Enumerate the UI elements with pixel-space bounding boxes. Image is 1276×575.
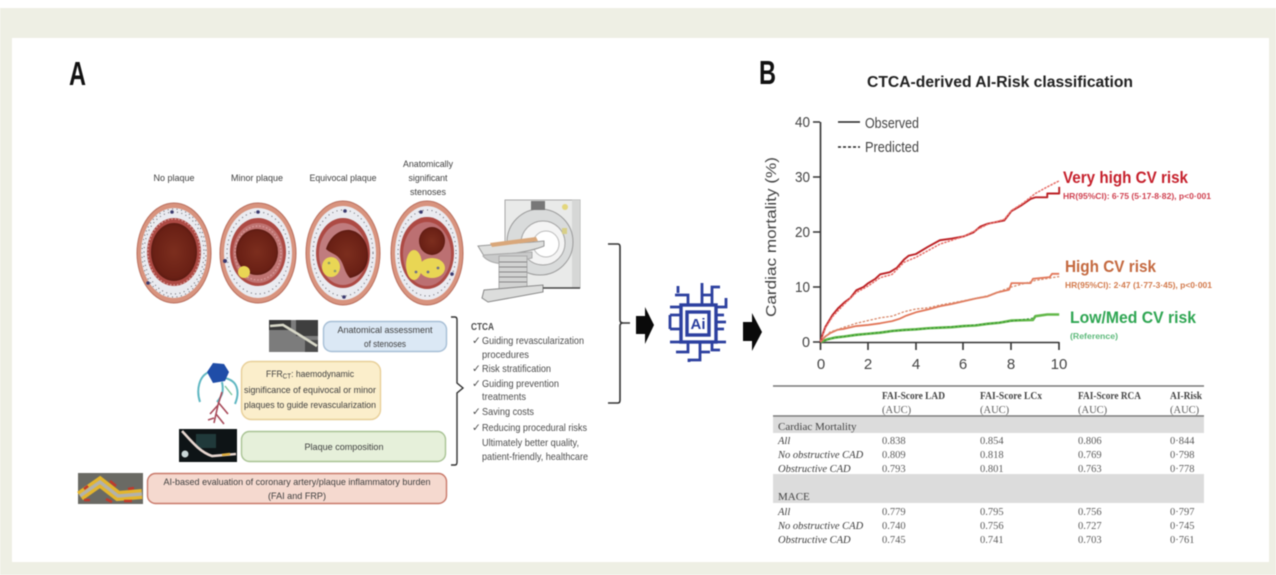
text block: CTCA benefits — [471, 321, 588, 463]
text block: CTCA benefits: Guiding revascularization — [482, 335, 584, 347]
box: FFR CT haemodynamic significance: FFR — [266, 369, 284, 380]
table header: (AUC) — [882, 405, 912, 416]
box: anatomical assessment of stenoses: Anatomical assessment — [338, 325, 433, 336]
table header: AI-Risk — [1170, 391, 1202, 402]
table section: cardiac mortality: Cardiac Mortality — [778, 421, 857, 433]
text block: CTCA benefits: Guiding prevention — [482, 378, 559, 390]
x tick labels: 8 — [1007, 356, 1015, 373]
table section: MACE: 0·761 — [1170, 535, 1194, 546]
table section: cardiac mortality: 0·798 — [1170, 450, 1194, 461]
line chart: cardiac mortality — [763, 114, 1212, 373]
legend: Predicted — [865, 139, 919, 156]
icon: coronary tree FFR model — [198, 363, 237, 424]
box: FFR CT haemodynamic significance: CT — [283, 374, 292, 380]
table section: MACE: 0.779 — [882, 507, 906, 518]
x tick labels — [817, 356, 1067, 373]
bracket: large right bracket — [608, 244, 630, 403]
label: low/med CV risk: (Reference) — [1070, 332, 1118, 341]
table section: MACE: MACE — [778, 491, 810, 503]
curve: very high risk — [820, 181, 1059, 342]
label: anatomically significant stenoses: significant — [408, 173, 448, 184]
table section: MACE: 0·797 — [1170, 507, 1194, 518]
icon: artery with minor plaque — [220, 203, 296, 303]
label: very high CV risk: Very high CV risk — [1063, 168, 1188, 187]
y tick labels — [795, 114, 810, 351]
table section: cardiac mortality: 0.854 — [980, 436, 1004, 447]
table section: cardiac mortality: 0.838 — [882, 436, 906, 447]
label: no plaque: No plaque — [154, 173, 194, 184]
legend: Observed — [865, 115, 919, 132]
label: very high CV risk: HR(95%CI): 6·75 (5·17-8·82), p<0·001 — [1063, 191, 1211, 201]
axes and ticks — [813, 122, 1059, 350]
box: FFR CT haemodynamic significance: significance of equivocal or minor — [244, 385, 376, 396]
table section: MACE: All — [777, 507, 790, 518]
box: FFR CT haemodynamic significance: plaques to guide revascularization — [244, 400, 376, 411]
text block: CTCA benefits: Reducing procedural risks — [482, 422, 587, 434]
table section: cardiac mortality: Obstructive CAD — [778, 464, 851, 475]
icon: AI chip — [670, 283, 726, 362]
text block: CTCA benefits: ✓ — [472, 406, 481, 418]
icon: CT image of stenosis — [269, 320, 318, 352]
y tick labels: 30 — [795, 169, 810, 186]
table header: FAI-Score LCx — [980, 391, 1043, 402]
label: minor plaque: Minor plaque — [231, 173, 283, 184]
label: anatomically significant stenoses — [403, 159, 453, 198]
y tick labels: 0 — [802, 334, 810, 351]
box: FFR CT haemodynamic significance — [242, 362, 380, 420]
table section: cardiac mortality: 0.818 — [980, 450, 1004, 461]
arrow: to chart — [743, 313, 762, 351]
x tick labels: 2 — [864, 356, 872, 373]
text block: CTCA benefits: ✓ — [472, 378, 481, 390]
text block: CTCA benefits: Ultimately better quality, — [482, 437, 579, 449]
table: AUC comparison — [773, 386, 1204, 546]
text block: CTCA benefits: Risk stratification — [482, 363, 551, 375]
curves — [820, 181, 1059, 342]
label: equivocal plaque: Equivocal plaque — [310, 173, 376, 184]
table section: MACE: 0·745 — [1170, 521, 1194, 532]
table section: MACE: 0.703 — [1078, 535, 1102, 546]
label: high CV risk — [1065, 257, 1212, 290]
label: very high CV risk — [1063, 168, 1211, 201]
table section: cardiac mortality: 0.801 — [980, 464, 1004, 475]
bracket: brace around CTCA modalities — [451, 317, 463, 465]
table section: MACE: 0.756 — [980, 521, 1004, 532]
table section: MACE — [777, 491, 1194, 546]
arrow: to AI chip — [636, 307, 654, 344]
table section: MACE: 0.795 — [980, 507, 1004, 518]
table section: cardiac mortality: 0.806 — [1078, 436, 1102, 447]
y tick labels: 20 — [795, 224, 810, 241]
box: AI-based evaluation of inflammatory burden: (FAI and FRP) — [268, 491, 326, 502]
curve: high risk — [820, 274, 1059, 342]
table section: MACE: 0.756 — [1078, 507, 1102, 518]
table section: cardiac mortality: 0·778 — [1170, 464, 1194, 475]
text block: CTCA benefits: ✓ — [472, 422, 481, 434]
label: high CV risk: HR(95%CI): 2·47 (1·77-3·45), p<0·001 — [1065, 280, 1212, 290]
heading: chart title: CTCA-derived AI-Risk classification — [867, 74, 1133, 91]
label: anatomically significant stenoses: Anatomically — [403, 159, 453, 170]
table section: cardiac mortality: 0.793 — [882, 464, 906, 475]
table section: cardiac mortality: 0.769 — [1078, 450, 1102, 461]
table section: cardiac mortality: 0.763 — [1078, 464, 1102, 475]
table header: (AUC) — [980, 405, 1010, 416]
table section: cardiac mortality — [777, 421, 1195, 475]
box: anatomical assessment of stenoses: of stenoses — [364, 339, 406, 350]
table section: cardiac mortality: All — [777, 436, 790, 447]
text block: CTCA benefits: Saving costs — [482, 406, 534, 418]
text block: CTCA benefits: patient-friendly, healthcare — [482, 451, 588, 463]
x tick labels: 4 — [912, 356, 920, 373]
table section: MACE: 0.741 — [980, 535, 1004, 546]
y axis title: Cardiac mortality (%) — [763, 157, 780, 317]
table section: MACE: Obstructive CAD — [778, 535, 851, 546]
x tick labels: 0 — [817, 356, 825, 373]
heading: panel B label: B — [759, 54, 776, 91]
table section: cardiac mortality: 0.809 — [882, 450, 906, 461]
icon: CT scanner — [478, 200, 580, 302]
icon: artery with significant stenosis — [391, 201, 463, 305]
curve: low/med risk — [820, 314, 1059, 342]
text block: CTCA benefits: treatments — [482, 391, 526, 403]
icon: artery with equivocal plaque — [306, 201, 380, 305]
box: anatomical assessment of stenoses — [324, 322, 446, 352]
icon: AI inflammatory burden image — [78, 473, 143, 504]
label: low/med CV risk: Low/Med CV risk — [1070, 308, 1196, 327]
table header: FAI-Score RCA — [1078, 391, 1141, 402]
box: FFR CT haemodynamic significance: : haemodynamic — [291, 369, 354, 380]
heading: panel A label: A — [69, 55, 86, 92]
icon: artery with no plaque — [137, 203, 211, 303]
artery stages with labels — [137, 159, 463, 305]
table header: (AUC) — [1078, 405, 1108, 416]
table section: cardiac mortality: No obstructive CAD — [777, 450, 864, 461]
icon: CT image of plaque composition — [179, 429, 237, 462]
legend — [838, 115, 919, 156]
table section: MACE: 0.745 — [882, 535, 906, 546]
y tick labels: 10 — [795, 279, 810, 296]
box: plaque composition — [242, 432, 446, 462]
text block: CTCA benefits: procedures — [482, 349, 529, 361]
text block: CTCA benefits: ✓ — [472, 335, 481, 347]
box: AI-based evaluation of inflammatory burden: AI-based evaluation of coronary artery/plaque inflammatory burden — [164, 477, 430, 488]
y tick labels: 40 — [795, 114, 810, 131]
x tick labels: 6 — [959, 356, 967, 373]
table section: MACE: No obstructive CAD — [777, 521, 864, 532]
table header: (AUC) — [1170, 405, 1200, 416]
table section: MACE: 0.727 — [1078, 521, 1102, 532]
box: plaque composition: Plaque composition — [304, 442, 384, 453]
label: Ai on chip: Ai — [690, 316, 706, 333]
label: high CV risk: High CV risk — [1065, 257, 1156, 276]
x tick labels: 10 — [1051, 356, 1067, 373]
label: anatomically significant stenoses: stenoses — [410, 187, 446, 198]
table header — [882, 391, 1202, 416]
box: AI-based evaluation of inflammatory burden — [148, 474, 446, 504]
text block: CTCA benefits: CTCA — [471, 321, 494, 333]
label: low/med CV risk — [1070, 308, 1196, 341]
table section: cardiac mortality: 0·844 — [1170, 436, 1195, 447]
table section: MACE: 0.740 — [882, 521, 906, 532]
table header: FAI-Score LAD — [882, 391, 945, 402]
text block: CTCA benefits: ✓ — [472, 363, 481, 375]
